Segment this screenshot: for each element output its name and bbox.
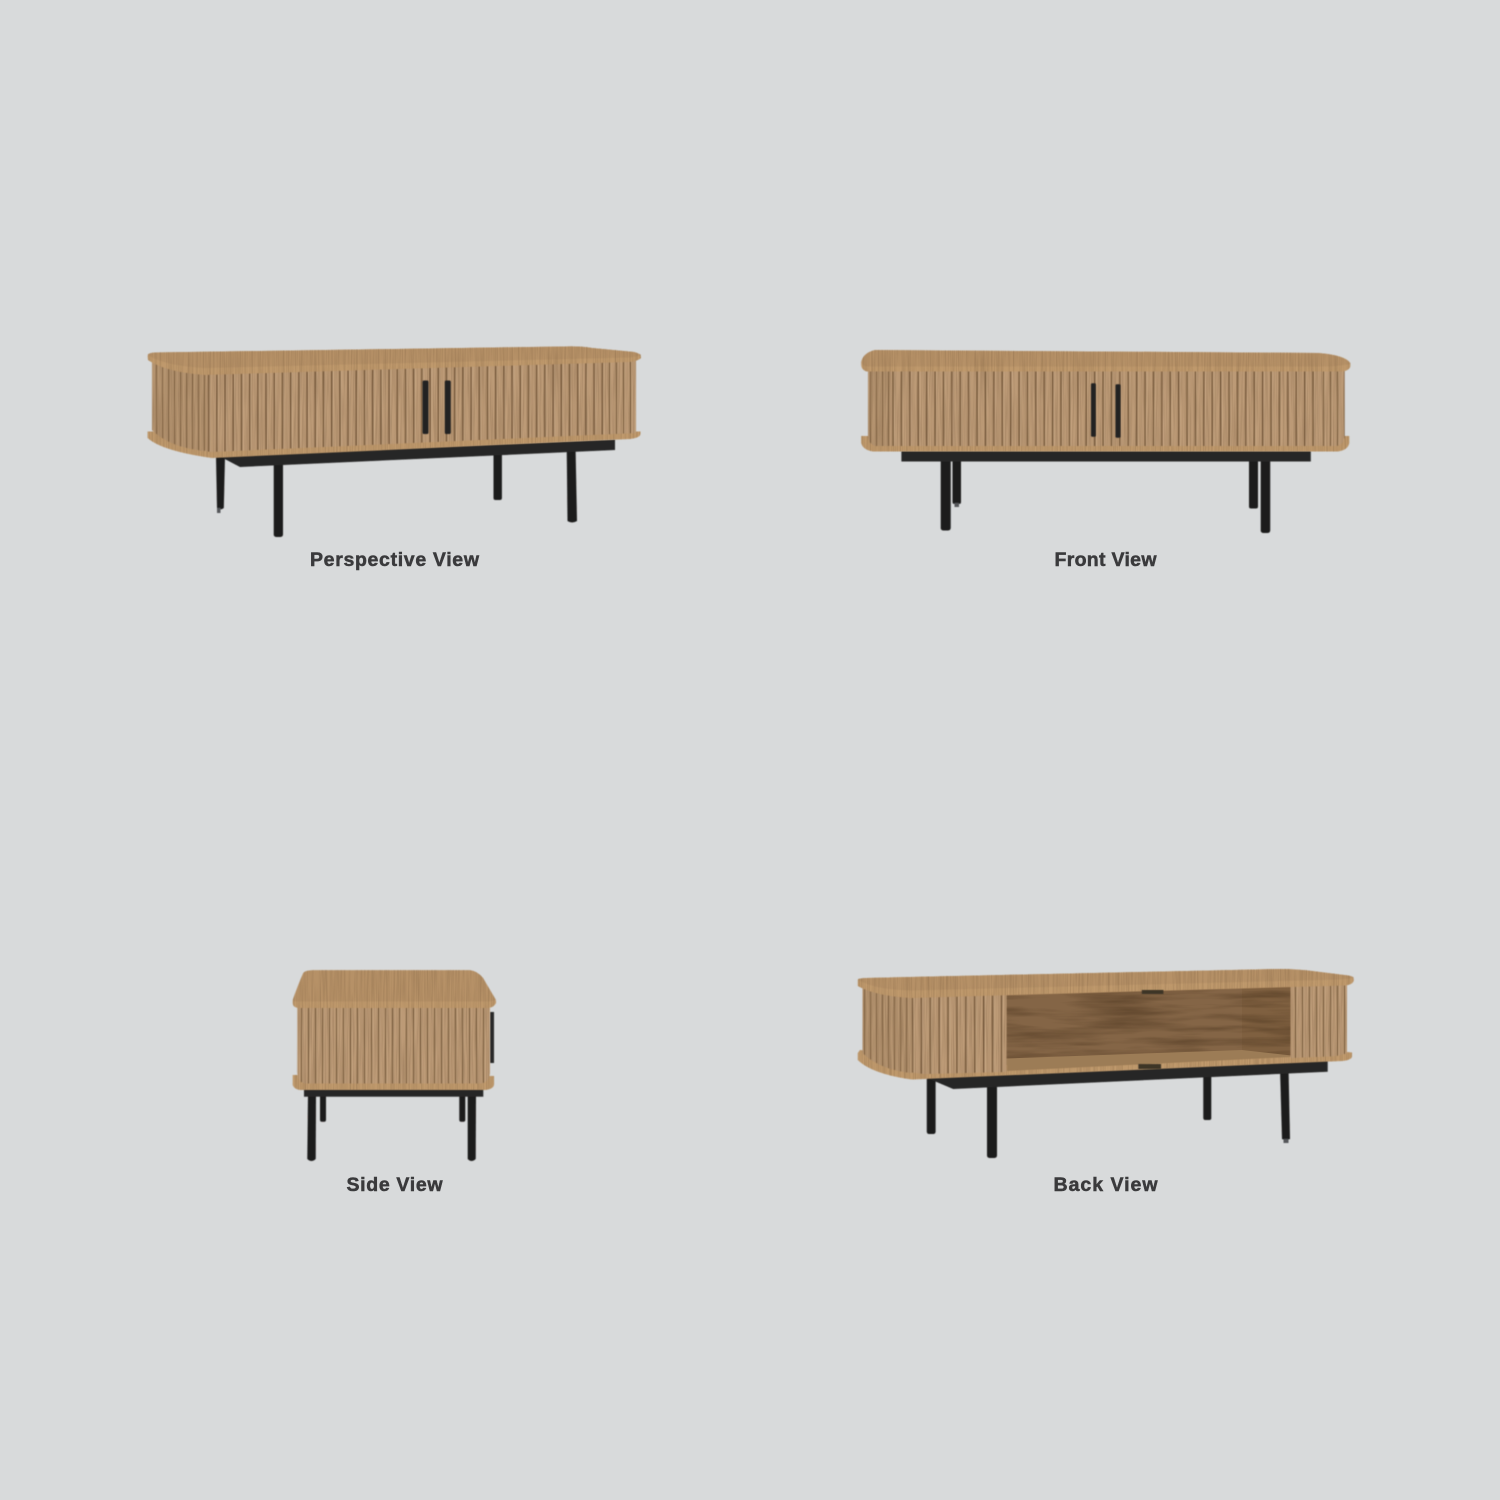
side legs and rail xyxy=(304,1088,483,1161)
compartment floor xyxy=(1000,1050,1296,1073)
compartment side wall xyxy=(1242,982,1296,1058)
front legs and rail xyxy=(901,451,1311,533)
panel: back view xyxy=(858,969,1354,1196)
perspective handles xyxy=(422,380,451,434)
side cabinet xyxy=(293,970,496,1090)
perspective legs and rail xyxy=(216,440,615,537)
back label: Back View xyxy=(1054,1174,1158,1196)
back open compartment xyxy=(1000,982,1296,1073)
front cabinet xyxy=(861,350,1350,452)
perspective cabinet xyxy=(148,346,641,458)
panel: front view xyxy=(861,350,1350,571)
panel: side view xyxy=(293,970,496,1196)
panel: perspective view xyxy=(148,346,641,571)
front handles xyxy=(1091,383,1120,438)
compartment base and back wall xyxy=(1000,982,1296,1072)
back cabinet xyxy=(858,969,1354,1080)
side label: Side View xyxy=(346,1174,443,1196)
side handle xyxy=(490,1012,494,1063)
front label: Front View xyxy=(1054,549,1157,571)
back clips xyxy=(1138,990,1163,1069)
perspective label: Perspective View xyxy=(310,549,480,571)
back legs and rail xyxy=(927,1060,1328,1158)
